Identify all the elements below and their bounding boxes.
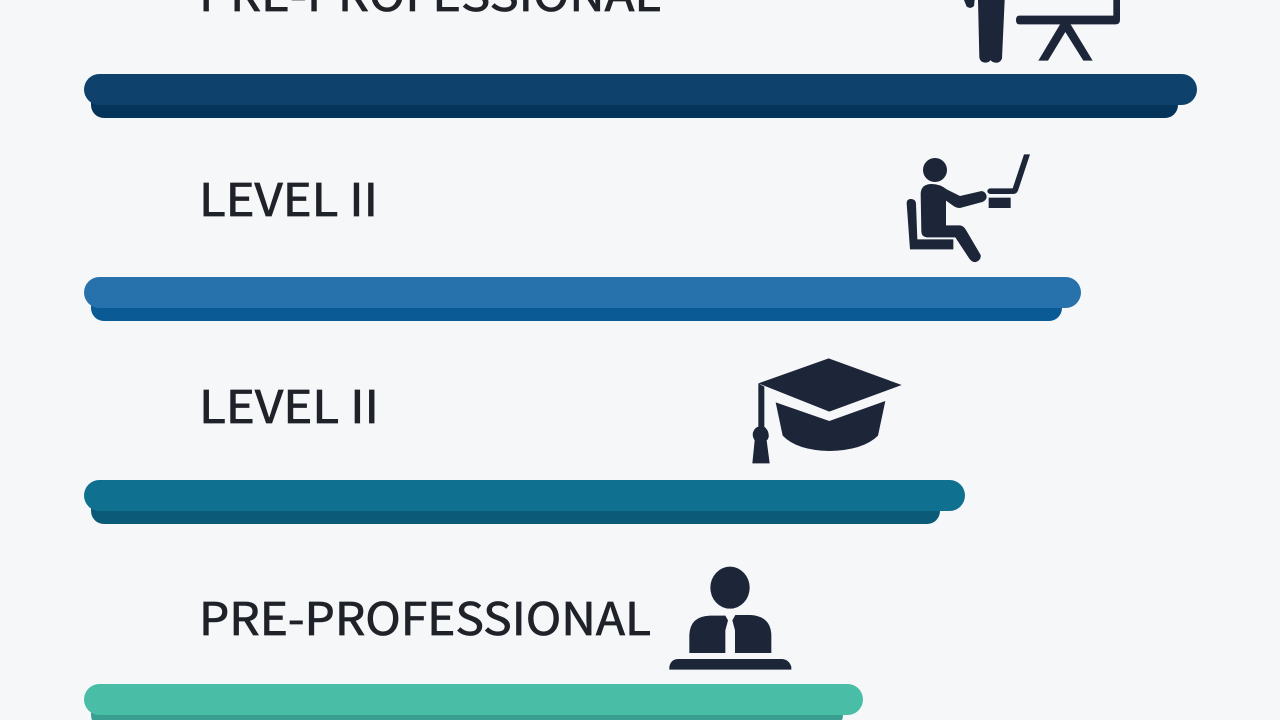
bar 1 (84, 74, 1197, 118)
icon: seated person at laptop (907, 154, 1030, 262)
heading: level II upper: LEVEL II (199, 164, 378, 229)
icon: person at desk (669, 567, 791, 670)
bar 4 (84, 684, 863, 720)
bar 3 (84, 480, 965, 524)
step 4: pre-professional (84, 567, 863, 720)
icon: graduation cap (752, 358, 902, 463)
step 1: top level (84, 0, 1197, 118)
icon: person presenting at whiteboard (964, 0, 1120, 63)
heading: pre-professional lower: PRE-PROFESSIONAL (199, 583, 651, 648)
step 2: level II (84, 154, 1081, 321)
step 3: level II lower (84, 358, 965, 524)
bar 2 (84, 277, 1081, 321)
heading: level II lower: LEVEL II (199, 371, 379, 436)
